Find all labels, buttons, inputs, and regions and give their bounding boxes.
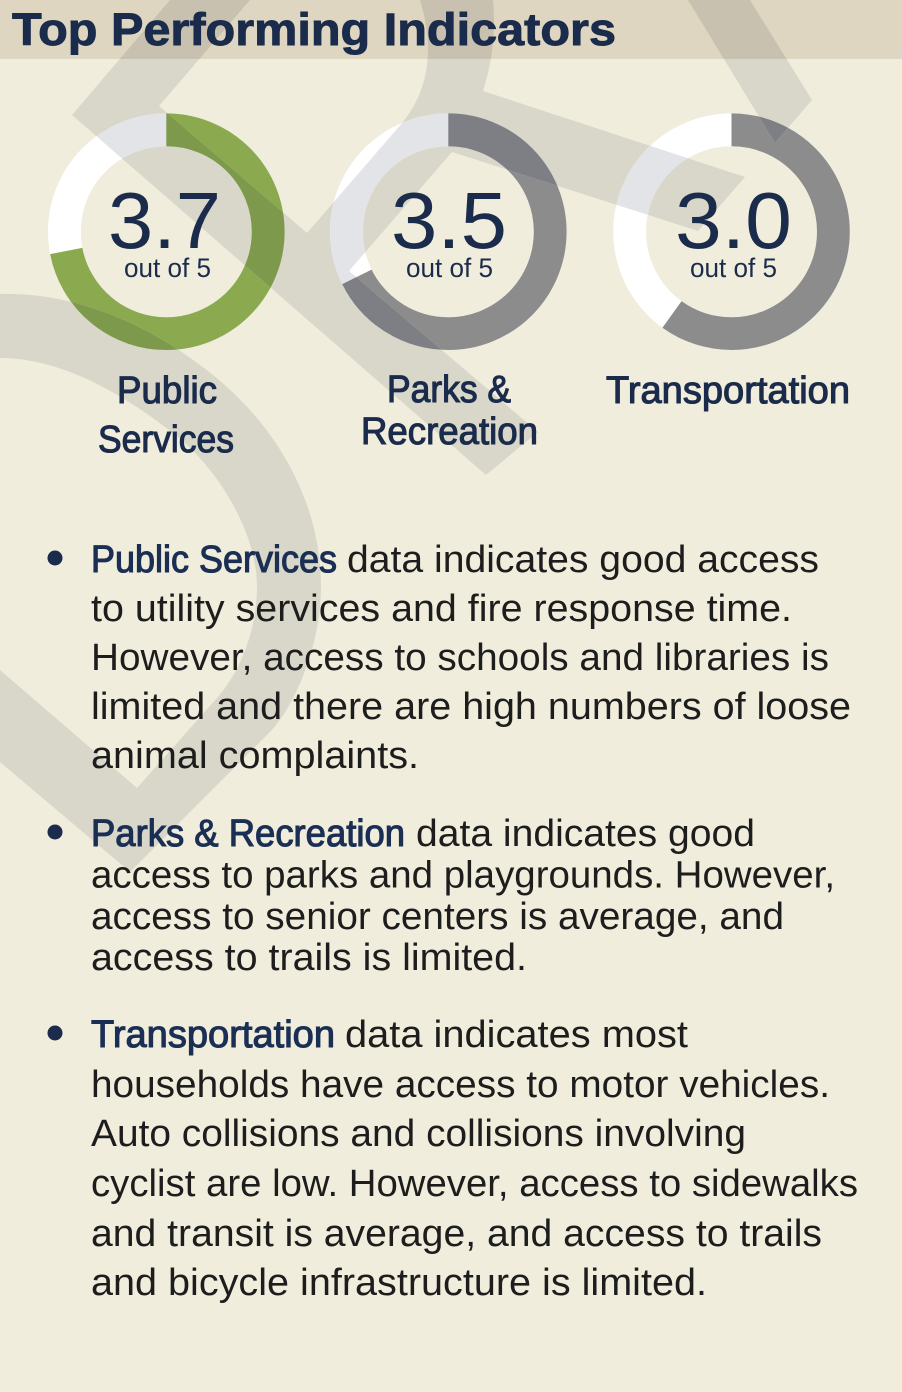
bullet paragraph: transportation: Transportation — [91, 1014, 335, 1056]
bullet paragraph: parks and recreation: data indicates good — [416, 813, 755, 855]
bullet paragraph: parks and recreation — [48, 813, 835, 979]
bullet paragraph: parks and recreation: Parks & Recreation — [91, 813, 405, 855]
bullet paragraph: public services — [48, 539, 851, 777]
bullet paragraph: transportation: data indicates most — [345, 1014, 688, 1056]
bullet paragraph: public services: to utility services and fire response time. — [91, 588, 792, 630]
donut chart: public services 3.7 — [64, 130, 268, 334]
bullet paragraph: public services: limited and there are high numbers of loose — [91, 686, 851, 728]
donut chart: transportation 3.0: 3.0 — [675, 176, 792, 265]
bullet paragraph: parks and recreation: access to trails is limited. — [91, 937, 527, 979]
background watermark shapes — [0, 0, 812, 872]
label: public services: Services — [98, 419, 234, 461]
bullet paragraph: parks and recreation: access to parks and playgrounds. However, — [91, 854, 835, 896]
bullet paragraph: transportation: and transit is average, and access to trails — [91, 1213, 822, 1255]
bullet paragraph: transportation — [48, 1014, 858, 1304]
donut chart: public services 3.7: out of 5 — [124, 253, 211, 283]
header band — [0, 0, 902, 59]
bullet paragraph: transportation: Auto collisions and collisions involving — [91, 1113, 746, 1155]
bullet paragraph: transportation: households have access to motor vehicles. — [91, 1064, 830, 1106]
bullet paragraph: transportation: cyclist are low. However, access to sidewalks — [91, 1163, 858, 1205]
label: parks and recreation: Recreation — [361, 411, 538, 453]
bullet paragraph: public services: Public Services — [91, 539, 337, 581]
bullet paragraph: public services: animal complaints. — [91, 735, 419, 777]
bullet paragraph: parks and recreation: access to senior centers is average, and — [91, 896, 784, 938]
label: public services — [98, 370, 234, 461]
donut chart: parks and recreation 3.5 — [346, 130, 550, 334]
bullet paragraph: public services: data indicates good access — [347, 539, 819, 581]
donut chart: transportation 3.0 — [630, 130, 833, 334]
label: parks and recreation: Parks & — [387, 369, 511, 411]
bullet paragraph: transportation: and bicycle infrastructure is limited. — [91, 1262, 707, 1304]
label: transportation: Transportation — [606, 370, 850, 412]
donut chart: parks and recreation 3.5: 3.5 — [391, 176, 507, 265]
title: Top Performing Indicators — [12, 4, 616, 55]
bullet paragraph: public services: However, access to schools and libraries is — [91, 637, 829, 679]
donut chart: parks and recreation 3.5: out of 5 — [406, 253, 493, 283]
donut chart: public services 3.7: 3.7 — [108, 176, 221, 265]
label: public services: Public — [117, 370, 217, 412]
label: parks and recreation — [361, 369, 538, 453]
donut chart: transportation 3.0: out of 5 — [690, 253, 777, 283]
